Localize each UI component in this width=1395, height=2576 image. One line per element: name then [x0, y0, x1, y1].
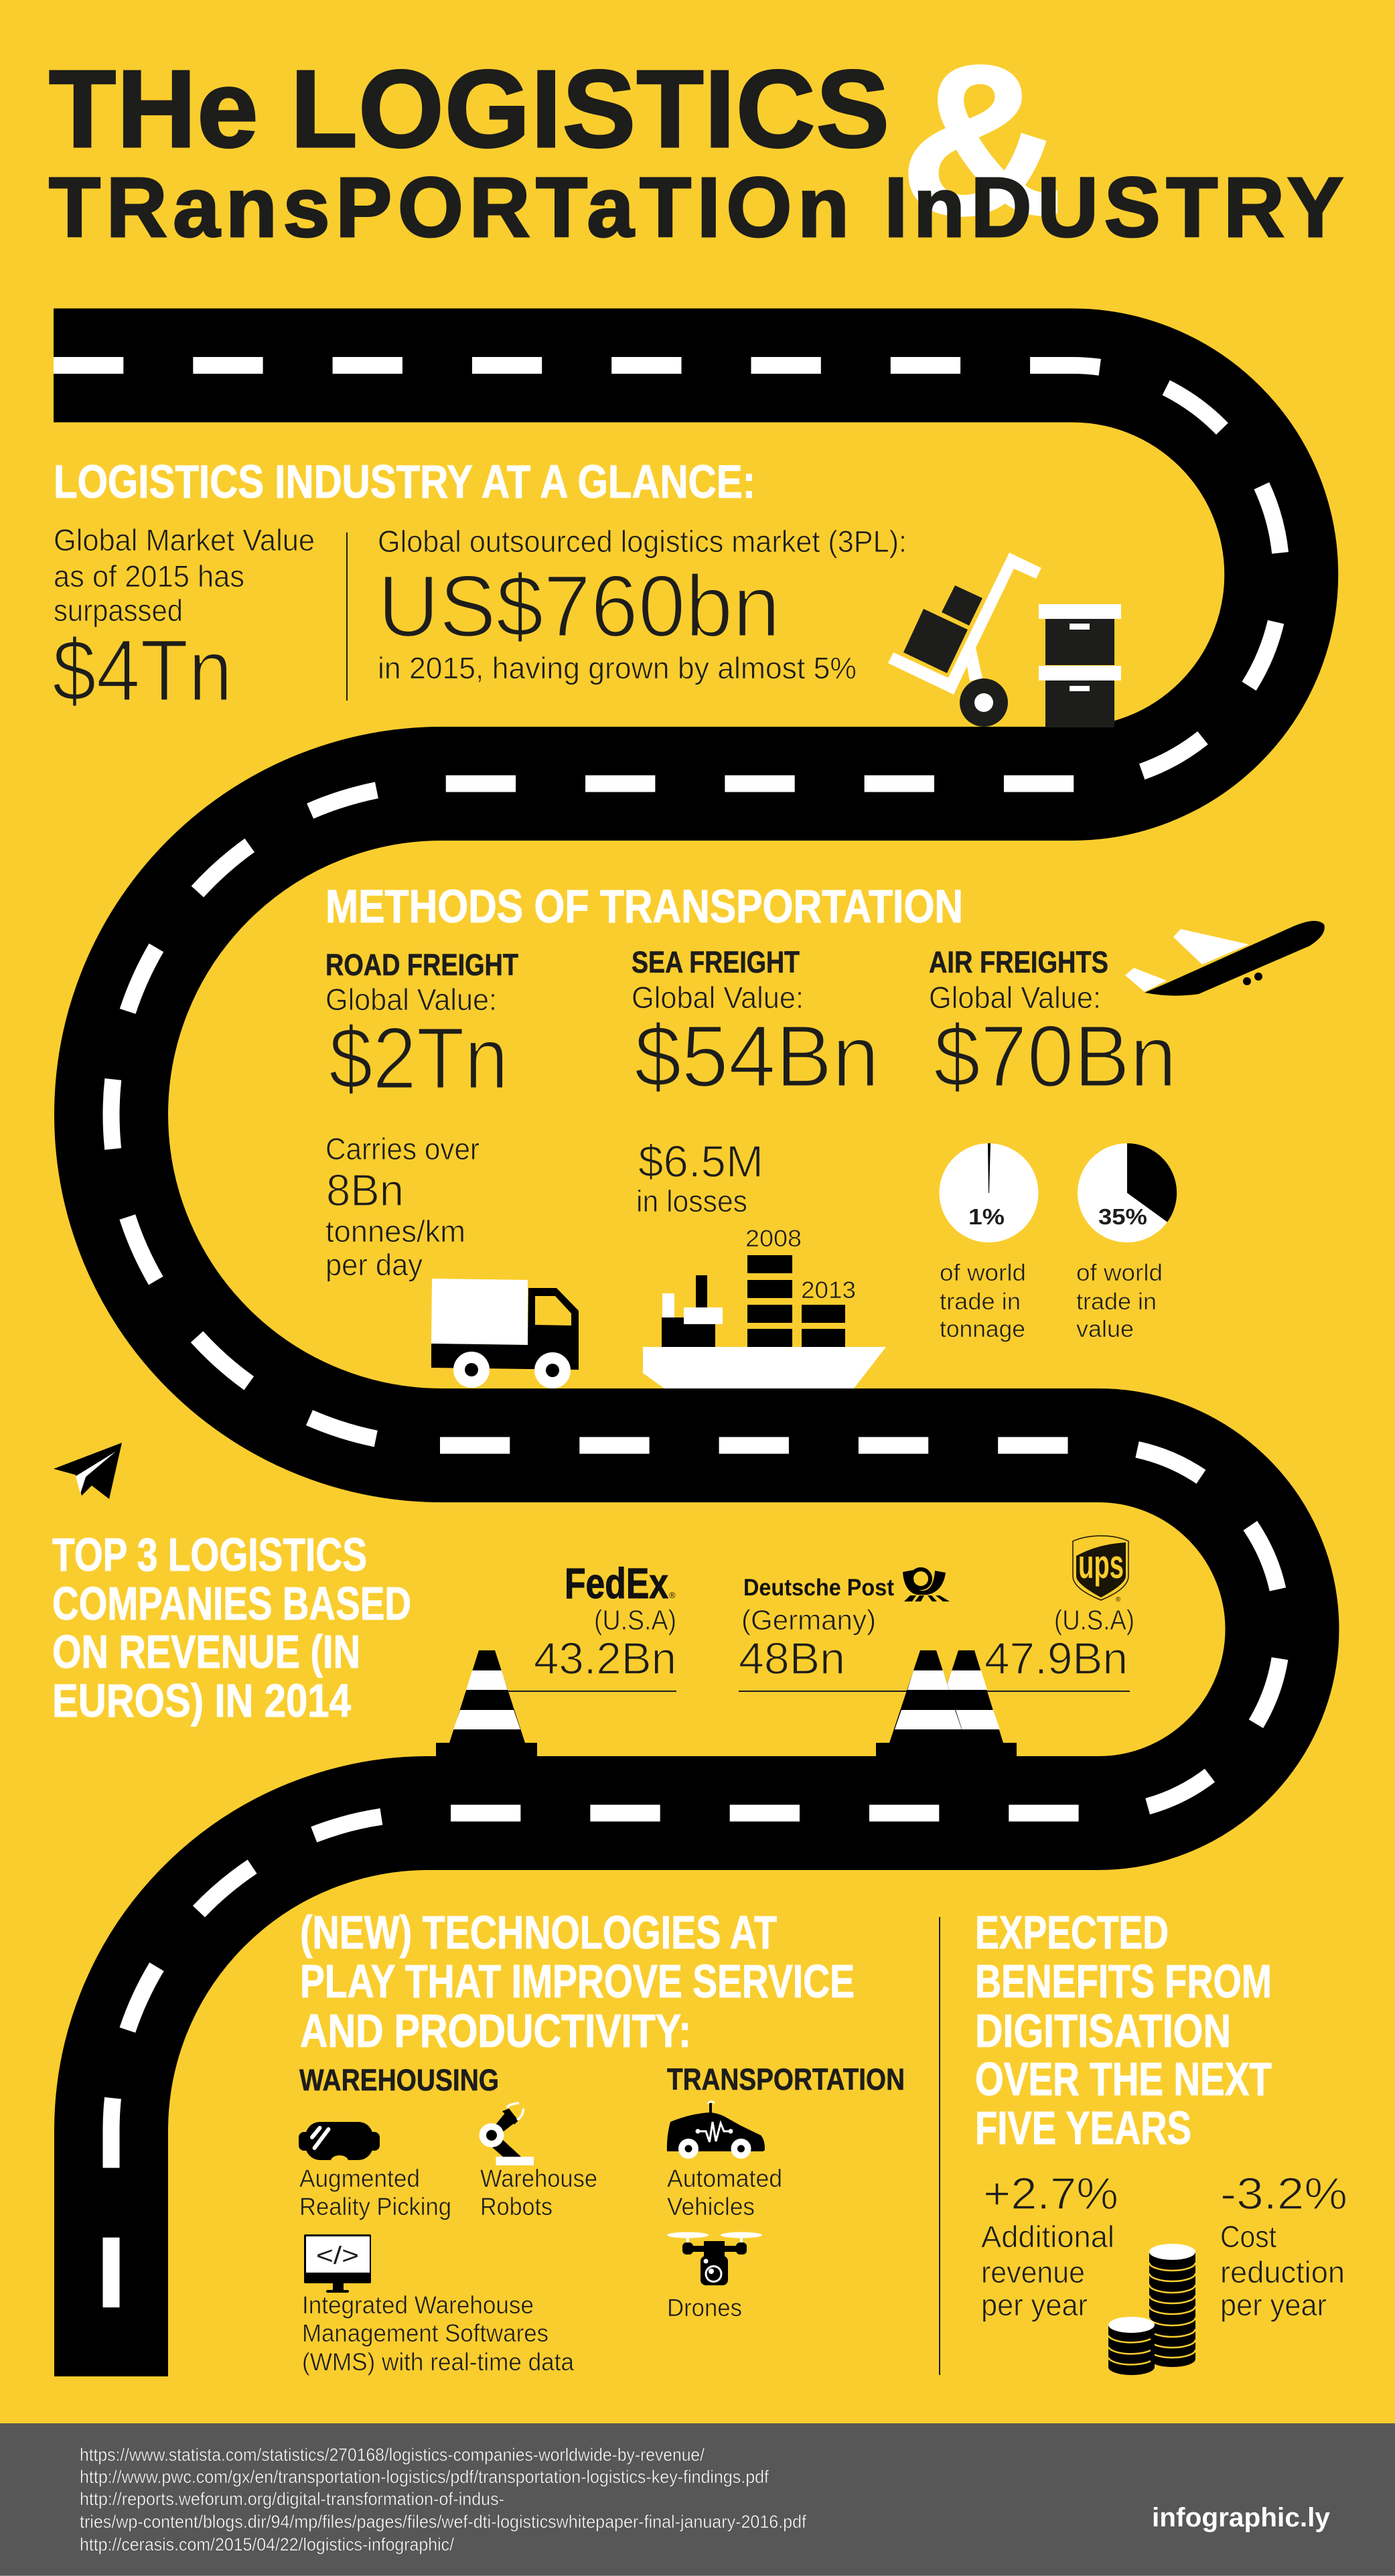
stat: additional revenue: revenue: [981, 2255, 1085, 2289]
company: fedex: 43.2Bn: [534, 1634, 676, 1684]
text: sources: https://www.statista.com/statistics/270168/logistics-companies-worldwide-by-revenue/: [80, 2445, 705, 2465]
column: sea freight: Global Value:: [632, 981, 804, 1015]
heading: top 3 companies: EUROS) IN 2014: [52, 1674, 351, 1727]
text: warehouse robots: [480, 2165, 597, 2220]
company: deutsche post: Deutsche Post: [743, 1575, 894, 1601]
title: THe LOGISTICS: [49, 48, 889, 170]
text: integrated warehouse management: Integrated Warehouse: [302, 2291, 534, 2319]
text: global market value: Global Market Value: [54, 523, 315, 557]
text: sources: [80, 2445, 806, 2555]
column: road freight: [325, 948, 518, 1282]
icon: filing boxes: [1039, 604, 1121, 727]
text: world trade in value: of world: [1076, 1260, 1163, 1286]
text: integrated warehouse management: Management Softwares: [302, 2319, 548, 2347]
stat: additional revenue: +2.7%: [983, 2169, 1118, 2219]
column: sea freight: $54Bn: [634, 1007, 879, 1105]
text: augmented reality picking: Augmented: [299, 2165, 420, 2192]
text: augmented reality picking: [299, 2165, 451, 2220]
stat: additional revenue: Additional: [981, 2220, 1114, 2254]
text: sources: tries/wp-content/blogs.dir/94/mp/files/pages/files/wef-dti-logisticswhitepaper-final-january-2016.pdf: [80, 2512, 806, 2532]
company: ups: (U.S.A): [1054, 1604, 1134, 1636]
icon: ups shield: ®: [1116, 1596, 1121, 1603]
column: air freights: [929, 945, 1177, 1105]
pie chart: 1 percent tonnage: 1%: [968, 1204, 1005, 1229]
panel: methods of transportation: [325, 880, 1177, 1342]
panel: expected benefits: [975, 1906, 1347, 2375]
pie chart: 35 percent value: [1078, 1143, 1177, 1242]
text: automated vehicles: Vehicles: [667, 2193, 755, 2220]
heading: new technologies: PLAY THAT IMPROVE SERVICE: [300, 1955, 855, 2007]
column: air freights: $70Bn: [934, 1007, 1177, 1105]
icon: post horn: [903, 1569, 950, 1601]
text: drones: Drones: [667, 2294, 742, 2321]
text: sources: http://www.pwc.com/gx/en/transportation-logistics/pdf/transportation-logistics-key-findings.pdf: [80, 2467, 769, 2487]
stat: 4 trillion: $4Tn: [52, 621, 232, 719]
text: world trade in tonnage: [940, 1260, 1026, 1342]
column: air freights: AIR FREIGHTS: [929, 945, 1108, 979]
pie chart: 1 percent tonnage: [939, 1143, 1038, 1242]
icon: warehouse robot arm: [480, 2103, 534, 2165]
icon: traffic cone left: [436, 1650, 537, 1757]
column: sea freight: in losses: [636, 1184, 747, 1218]
icon: automated car: [667, 2101, 765, 2159]
stat: additional revenue: per year: [981, 2288, 1088, 2322]
text: sources: http://cerasis.com/2015/04/22/logistics-infographic/: [80, 2534, 454, 2555]
text: world trade in tonnage: tonnage: [940, 1316, 1025, 1342]
column: air freights: Global Value:: [929, 981, 1101, 1015]
text: sources: http://reports.weforum.org/digital-transformation-of-indus-: [80, 2489, 504, 2509]
column: road freight: tonnes/km: [325, 1214, 465, 1248]
company: fedex: ®: [669, 1590, 676, 1600]
stat: 760 billion: US$760bn: [378, 557, 780, 655]
icon: drone: [667, 2232, 762, 2285]
heading: at a glance: LOGISTICS INDUSTRY AT A GLANCE:: [54, 455, 755, 508]
stat: cost reduction: per year: [1220, 2288, 1327, 2322]
company: deutsche post: [739, 1569, 1130, 1692]
stat: cost reduction: reduction: [1220, 2255, 1345, 2289]
stat: additional revenue: [981, 2169, 1118, 2322]
text: automated vehicles: Automated: [667, 2165, 782, 2192]
column: road freight: Global Value:: [325, 983, 497, 1017]
text: world trade in tonnage: trade in: [940, 1289, 1021, 1315]
heading: top 3 companies: ON REVENUE (IN: [52, 1626, 360, 1678]
subheading: warehousing: WAREHOUSING: [299, 2063, 499, 2097]
text: warehouse robots: Robots: [480, 2193, 553, 2220]
heading: expected benefits: BENEFITS FROM: [975, 1955, 1272, 2007]
text: warehouse robots: Warehouse: [480, 2165, 597, 2192]
footer bar: [0, 2423, 1395, 2576]
column: sea freight: [632, 945, 879, 1303]
icon: delivery truck: [431, 1279, 579, 1388]
text: global market value: [54, 523, 315, 628]
text: global market value: as of 2015 has: [54, 559, 244, 593]
column: road freight: ROAD FREIGHT: [325, 948, 518, 982]
icon: monitor with code: [304, 2234, 371, 2293]
stat: cost reduction: -3.2%: [1220, 2169, 1347, 2219]
subheading: transportation: TRANSPORTATION: [667, 2062, 905, 2096]
heading: expected benefits: EXPECTED: [975, 1906, 1169, 1958]
text: world trade in value: [1076, 1260, 1163, 1342]
heading: new technologies: (NEW) TECHNOLOGIES AT: [300, 1906, 777, 1958]
heading: expected benefits: [975, 1906, 1272, 2154]
text: augmented reality picking: Reality Picking: [299, 2193, 451, 2220]
title: TRansPORTaTIOn InDUSTRY: [49, 160, 1343, 255]
company: fedex: [507, 1559, 676, 1692]
panel: top 3 logistics companies: [52, 1528, 1134, 1727]
text: world trade in tonnage: of world: [940, 1260, 1026, 1286]
heading: new technologies: [300, 1906, 855, 2057]
company: deutsche post: (Germany): [741, 1604, 876, 1636]
text: world trade in value: value: [1076, 1316, 1134, 1342]
heading: top 3 companies: TOP 3 LOGISTICS: [52, 1528, 367, 1581]
icon: container ship: [643, 1255, 886, 1388]
heading: expected benefits: DIGITISATION: [975, 2005, 1231, 2057]
column: road freight: 8Bn: [326, 1165, 404, 1216]
panel: new technologies: [299, 1906, 905, 2376]
company: deutsche post: 48Bn: [739, 1634, 845, 1684]
icon: airplane: [1125, 921, 1325, 996]
heading: top 3 companies: COMPANIES BASED: [52, 1577, 411, 1630]
company: fedex: FedEx: [565, 1559, 668, 1607]
icon: monitor with code: </>: [316, 2242, 359, 2269]
heading: new technologies: AND PRODUCTIVITY:: [300, 2005, 691, 2057]
company: ups: 47.9Bn: [984, 1634, 1128, 1684]
icon: coin stacks: [1108, 2244, 1195, 2375]
icon: traffic cones right: [876, 1650, 1017, 1757]
text: integrated warehouse management: [302, 2291, 574, 2376]
column: road freight: Carries over: [325, 1132, 480, 1166]
stat: cost reduction: [1220, 2169, 1347, 2322]
text: integrated warehouse management: (WMS) with real-time data: [302, 2348, 574, 2376]
text: growth: in 2015, having grown by almost 5%: [378, 651, 857, 685]
text: world trade in value: trade in: [1076, 1289, 1157, 1315]
icon: ups shield: ups: [1078, 1542, 1124, 1587]
text: automated vehicles: [667, 2165, 782, 2220]
winding road: [54, 366, 1282, 2376]
icon: ups shield: [1073, 1536, 1128, 1603]
text: global market value: surpassed: [54, 593, 183, 628]
heading: expected benefits: FIVE YEARS: [975, 2102, 1191, 2154]
pie chart: 35 percent value: 35%: [1098, 1204, 1147, 1229]
logo: infographic.ly: infographic.ly: [1152, 2503, 1331, 2532]
icon: hand truck with boxes: [888, 553, 1041, 727]
column: sea freight: SEA FREIGHT: [632, 945, 800, 979]
column: road freight: $2Tn: [329, 1009, 508, 1107]
column: sea freight: 2008: [745, 1226, 802, 1252]
company: ups: [984, 1536, 1134, 1684]
panel: logistics industry at a glance: [52, 455, 907, 719]
column: road freight: per day: [325, 1248, 423, 1282]
icon: vr goggles: [299, 2122, 380, 2166]
column: sea freight: 2013: [801, 1277, 856, 1303]
title: [49, 48, 1343, 255]
text: outsourced market: Global outsourced logistics market (3PL):: [378, 524, 907, 559]
column: sea freight: $6.5M: [638, 1137, 763, 1187]
ampersand: &: [899, 19, 1063, 259]
heading: top 3 companies: [52, 1528, 411, 1727]
icon: paper plane: [54, 1443, 122, 1499]
heading: expected benefits: OVER THE NEXT: [975, 2053, 1272, 2105]
stat: cost reduction: Cost: [1220, 2220, 1276, 2254]
heading: methods: METHODS OF TRANSPORTATION: [325, 880, 963, 932]
company: fedex: (U.S.A): [594, 1604, 676, 1636]
